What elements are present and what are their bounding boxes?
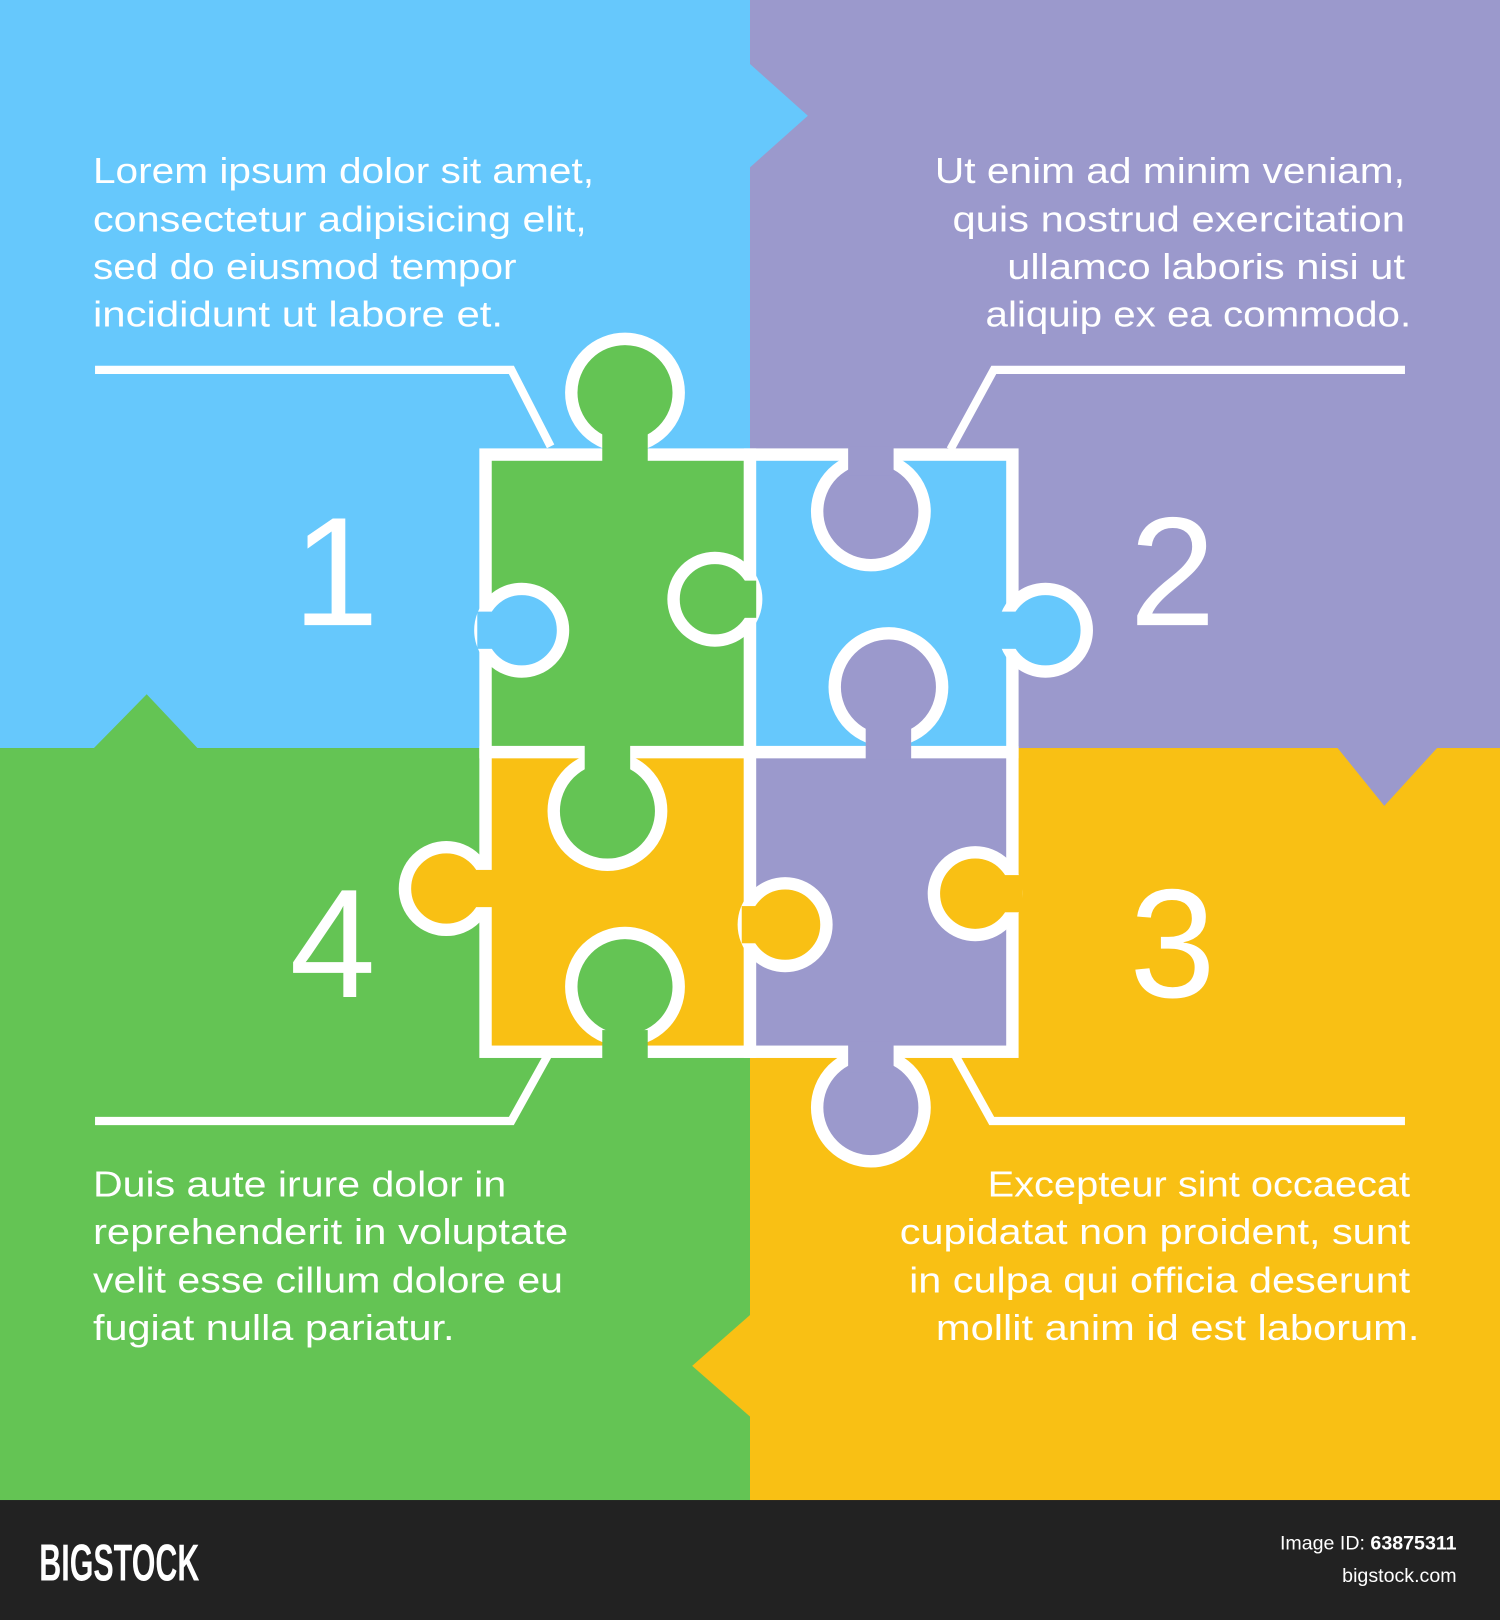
numbers — [290, 485, 1216, 1030]
footer bar: bigstock.com — [1342, 1565, 1457, 1587]
puzzle — [405, 339, 1087, 1161]
text block 3: cupidatat non proident, sunt — [900, 1211, 1410, 1252]
text block 4: velit esse cillum dolore eu — [93, 1259, 563, 1300]
text block 1: incididunt ut labore et. — [93, 293, 503, 334]
notch: green into blue — [93, 694, 198, 749]
notch: yellow into green — [692, 1314, 751, 1418]
notch: purple into yellow — [1337, 747, 1438, 806]
footer bar — [0, 1500, 1500, 1620]
text block 2: ullamco laboris nisi ut — [1007, 246, 1405, 287]
panel: blue quadrant — [0, 0, 750, 748]
numbers: 3 — [1129, 857, 1216, 1030]
text block 2: quis nostrud exercitation — [952, 198, 1405, 239]
text block 3: in culpa qui officia deserunt — [909, 1259, 1410, 1300]
connector lines — [95, 370, 1405, 1121]
text block 4: Duis aute irure dolor in — [93, 1163, 506, 1204]
notch: blue into purple — [750, 64, 808, 167]
panel: purple quadrant — [750, 0, 1500, 748]
text block 3: Excepteur sint occaecat — [988, 1163, 1410, 1204]
puzzle necks — [467, 434, 1026, 1072]
footer bar: BIGSTOCK — [39, 1534, 199, 1592]
text block 4: fugiat nulla pariatur. — [93, 1307, 455, 1348]
footer bar: Image ID: 63875311 — [1280, 1533, 1457, 1555]
text block 2: Ut enim ad minim veniam, — [935, 150, 1405, 191]
text block 1: Lorem ipsum dolor sit amet, — [93, 150, 594, 191]
text block 4: reprehenderit in voluptate — [93, 1211, 568, 1252]
numbers: 2 — [1129, 485, 1216, 658]
text block 2: aliquip ex ea commodo. — [986, 293, 1411, 334]
text block 3: mollit anim id est laborum. — [936, 1307, 1419, 1348]
panel: yellow quadrant — [750, 748, 1500, 1500]
numbers: 1 — [293, 485, 379, 658]
text block 1: consectetur adipisicing elit, — [93, 198, 587, 239]
numbers: 4 — [290, 857, 376, 1030]
panel: green quadrant — [0, 748, 750, 1500]
text block 1: sed do eiusmod tempor — [93, 246, 517, 287]
